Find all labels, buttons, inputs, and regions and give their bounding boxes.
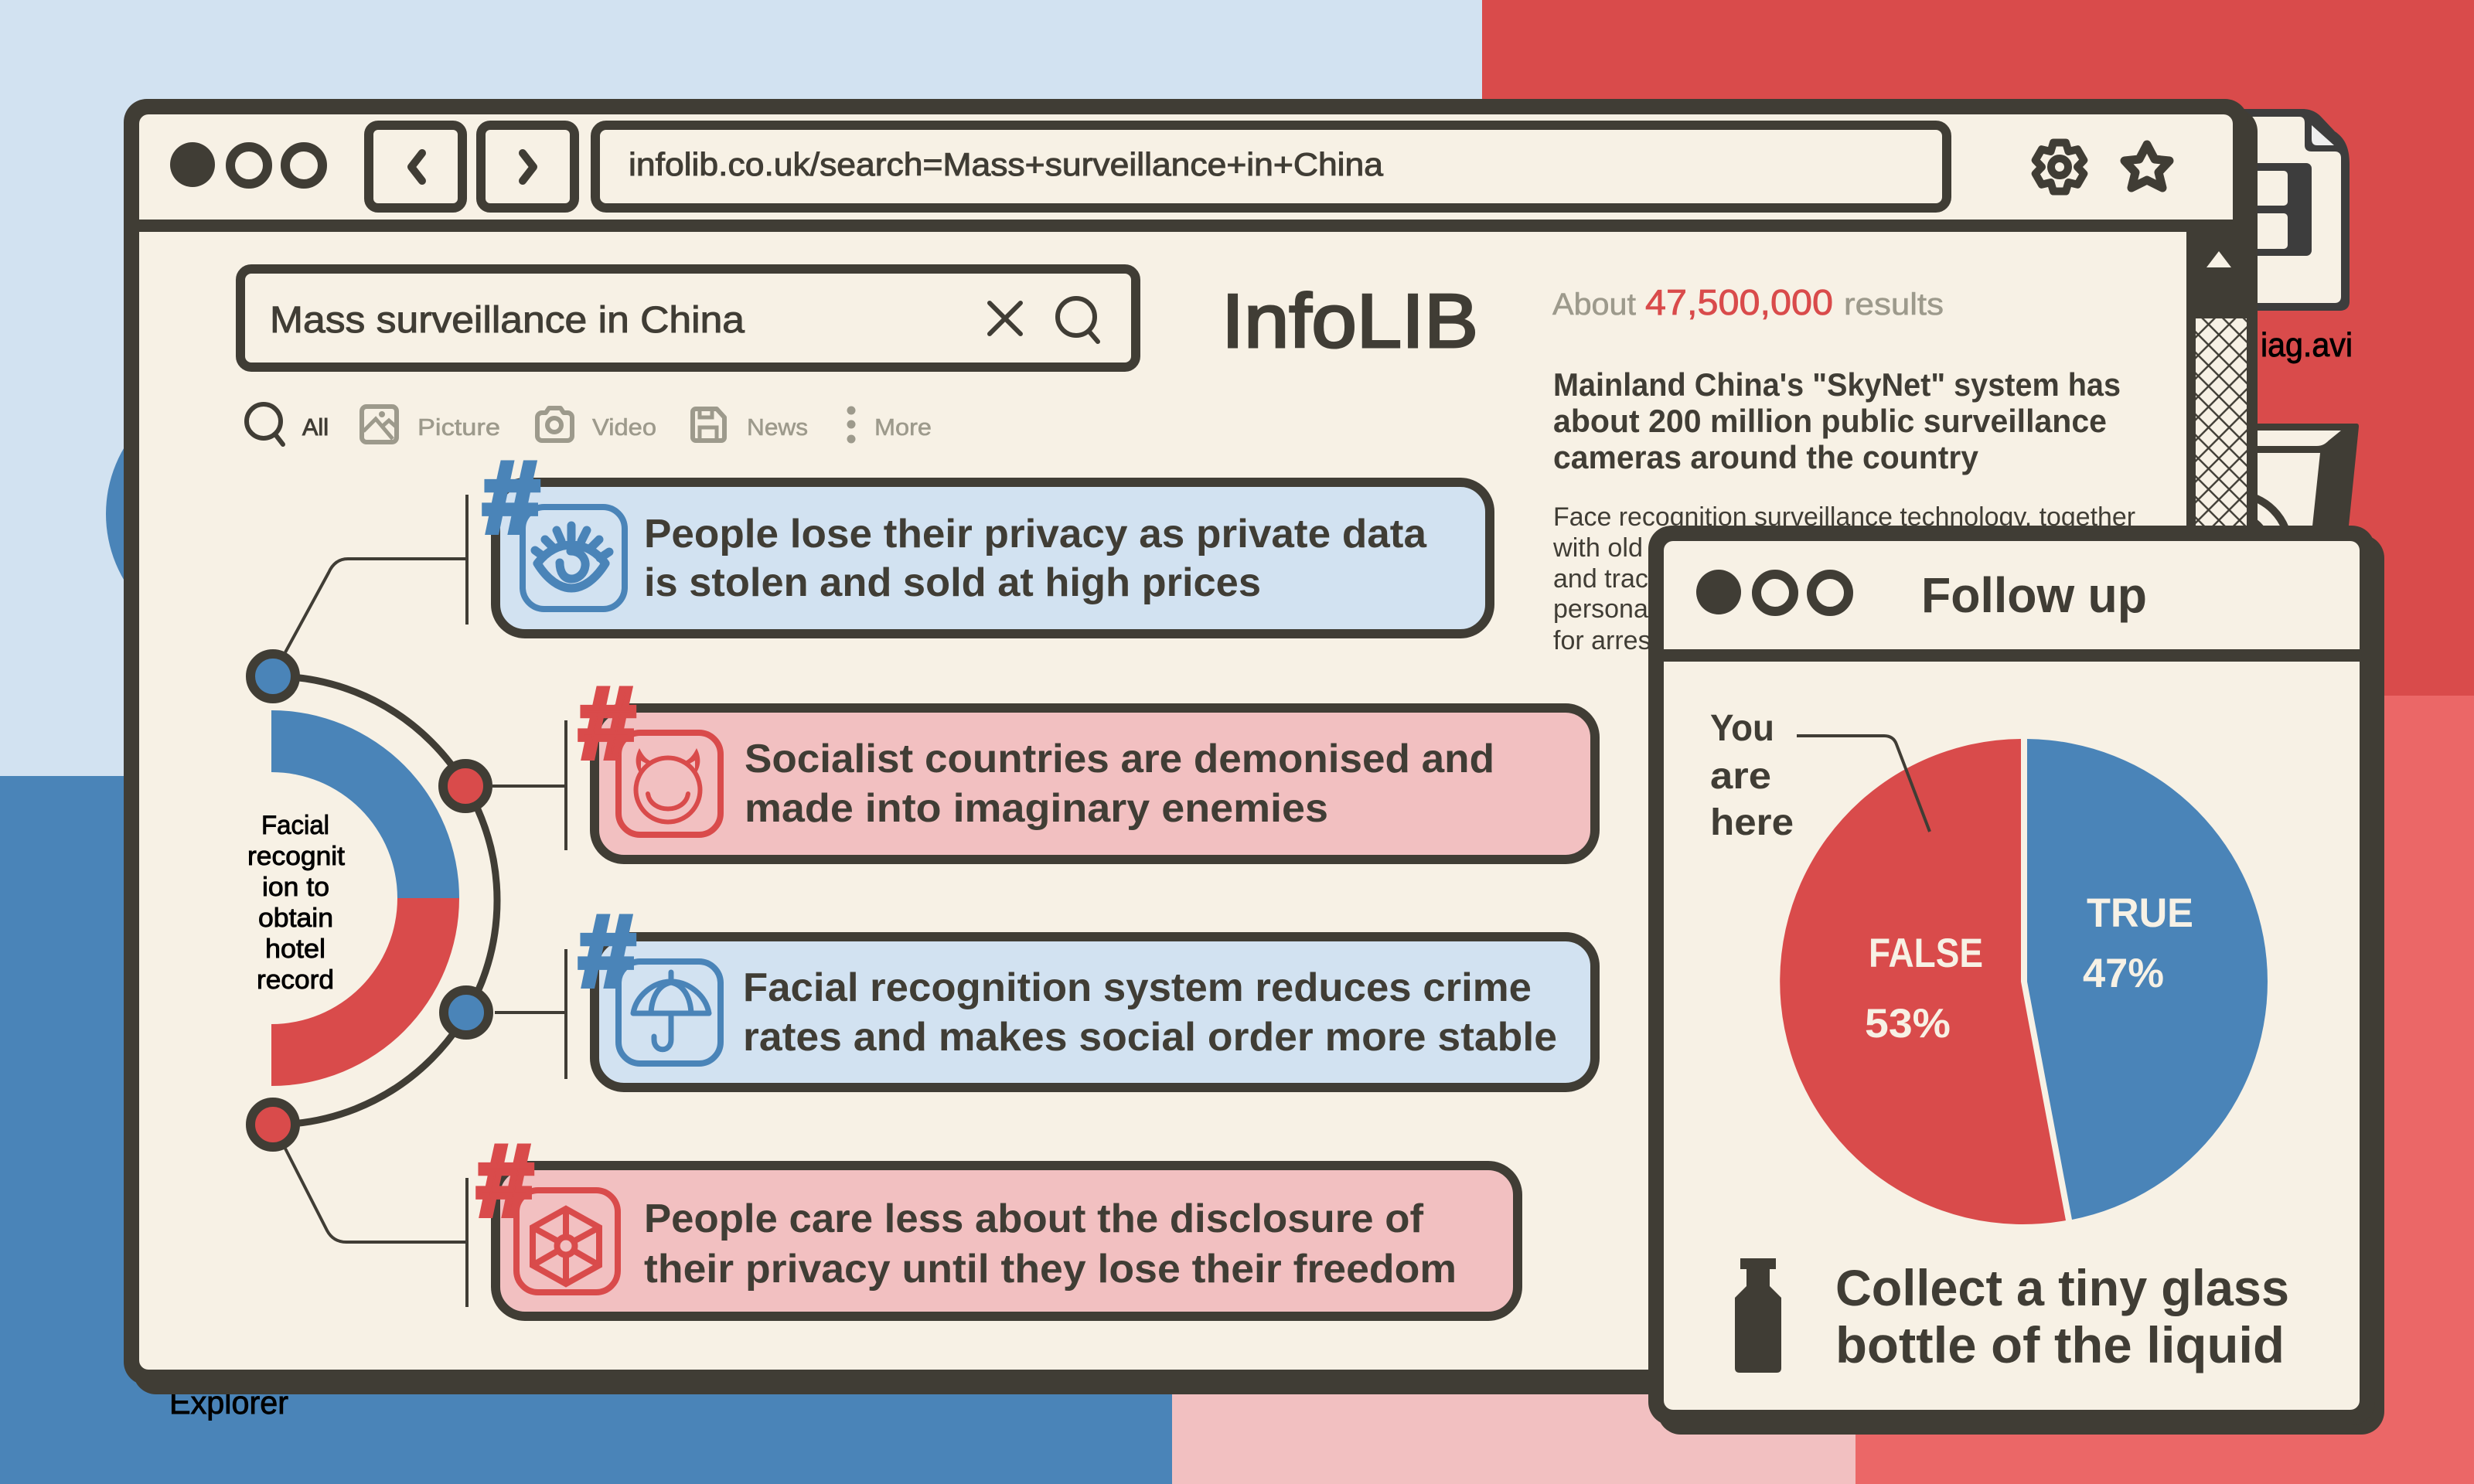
tab: Picture: Picture [417, 414, 500, 441]
card: enemies [579, 666, 1595, 859]
card: enemies: made into imaginary enemies [745, 786, 1328, 831]
result paragraph: Face recognition surveillance technology, together [1553, 502, 2135, 532]
hash mark: # [579, 894, 635, 1007]
headline result: cameras around the country [1553, 439, 1979, 475]
tab: Video: Video [592, 414, 656, 441]
callout: you are here: You [1710, 708, 1774, 749]
search box: Mass surveillance in China [270, 300, 745, 341]
result paragraph [1552, 502, 2135, 655]
tab: News [693, 409, 808, 441]
card: disclosure: People care less about the disclosure of [644, 1196, 1424, 1241]
label: file name: iag.avi [2261, 326, 2353, 364]
back button [369, 125, 462, 208]
label: Explorer: Explorer [169, 1384, 288, 1421]
window dots [170, 142, 322, 187]
hub label: obtain [258, 904, 333, 933]
result paragraph: personal [1553, 594, 1654, 624]
connector lines [273, 495, 566, 1307]
icon: star [2125, 145, 2169, 188]
icon: search [1058, 298, 1098, 342]
nodes [250, 654, 489, 1147]
results count: results [1844, 288, 1944, 322]
scrollbar [2186, 232, 2258, 543]
icon: bottle [1735, 1258, 1781, 1373]
headline result: about 200 million public surveillance [1553, 403, 2107, 439]
card: crime rates [579, 894, 1595, 1087]
hub label [247, 811, 346, 995]
tab: More [847, 407, 932, 444]
result paragraph: with old [1552, 533, 1643, 563]
tab: More: More [874, 414, 932, 441]
blue circle behind window [106, 384, 366, 644]
tab: All: All [302, 414, 329, 441]
icon: eye [523, 507, 625, 609]
address bar: infolib.co.uk/search=Mass+surveillance+in+China [629, 146, 1384, 182]
hub label: ion to [262, 873, 329, 902]
pie chart: FALSE [1869, 931, 1983, 976]
icon: file behind window [2227, 109, 2350, 311]
card: disclosure: their privacy until they lose their freedom [644, 1247, 1457, 1292]
forward button [481, 125, 574, 208]
window frame [1648, 526, 2384, 1435]
pie chart [1780, 739, 2268, 1224]
logo: InfoLIB: InfoLIB [1222, 278, 1478, 363]
hub label: record [257, 965, 334, 995]
icon: settings gear [2036, 142, 2084, 192]
tab: News: News [747, 414, 808, 441]
card: disclosure [477, 1124, 1518, 1316]
pie chart: 47% [2083, 951, 2164, 996]
card: privacy: People lose their privacy as private data [644, 512, 1427, 556]
icon: hexagon [516, 1190, 618, 1292]
hash mark: # [477, 1124, 533, 1237]
headline result [1553, 366, 2121, 475]
panel: follow up window [1648, 526, 2384, 1435]
pie chart: 53% [1865, 1001, 1951, 1047]
hub label: recognit [247, 842, 346, 871]
result paragraph: and tracking [1553, 564, 1696, 594]
address bar [595, 125, 1947, 208]
card: privacy: is stolen and sold at high prices [644, 560, 1261, 605]
half donut [271, 710, 459, 1086]
hub label: Facial [261, 811, 329, 840]
diagram: radial hub [247, 495, 566, 1307]
icon: umbrella [618, 962, 721, 1064]
card: privacy [483, 441, 1490, 634]
results count: 47,500,000 [1645, 282, 1833, 322]
search tabs [247, 404, 932, 444]
caption: Collect a tiny glass [1835, 1259, 2289, 1316]
card: crime rates: Facial recognition system reduces crime [743, 965, 1532, 1010]
card: enemies: Socialist countries are demonised and [745, 737, 1494, 781]
heading: Follow up [1921, 567, 2147, 623]
toolbar [170, 125, 2169, 208]
results count [1552, 282, 1944, 322]
icon: bin behind window [2179, 424, 2359, 604]
hash mark: # [579, 666, 635, 779]
result paragraph: for arrest [1553, 626, 1659, 655]
callout: you are here: are [1710, 756, 1771, 797]
panel: browser window [124, 99, 2258, 1394]
icon: devil [618, 733, 721, 835]
caption: bottle of the liquid [1835, 1316, 2285, 1373]
window frame [124, 99, 2258, 1394]
headline result: Mainland China's "SkyNet" system has [1553, 366, 2121, 403]
callout: you are here: here [1710, 802, 1794, 843]
caption [1835, 1259, 2289, 1373]
hub label: hotel [265, 934, 325, 964]
hash mark: # [483, 441, 539, 553]
tab: Video [537, 408, 656, 441]
card: crime rates: rates and makes social order more stable [743, 1015, 1557, 1060]
tab: Picture [362, 407, 500, 442]
search box [240, 269, 1136, 367]
icon: clear [990, 303, 1021, 334]
window dots [1696, 570, 1849, 614]
pie chart: TRUE [2087, 890, 2193, 936]
results count: About [1552, 288, 1636, 322]
callout: you are here [1710, 708, 1930, 843]
tab: All [247, 404, 329, 444]
